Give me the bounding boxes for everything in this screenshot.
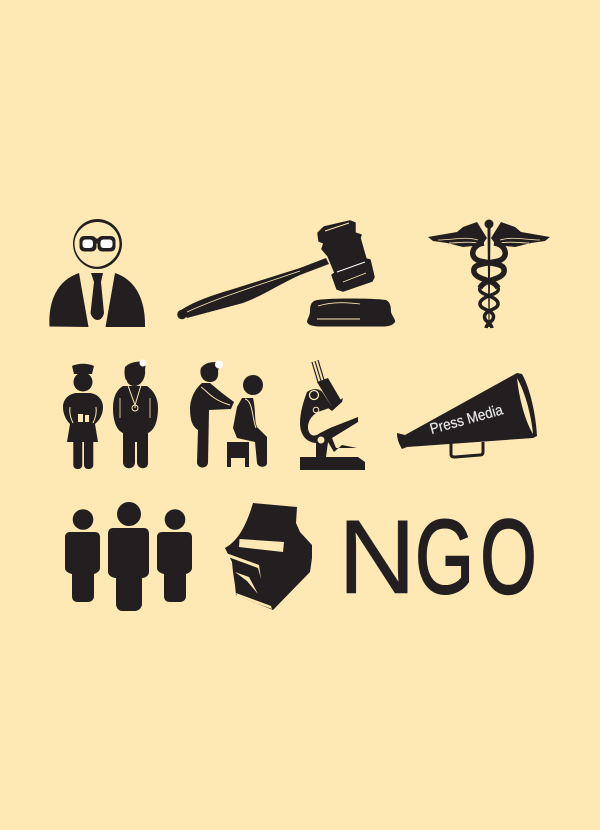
icon: doctor with stethoscope	[113, 360, 158, 468]
heading: NGO	[338, 499, 536, 616]
icon: doctor examining patient	[190, 360, 267, 468]
icon: megaphone	[397, 373, 537, 457]
icon: gavel	[177, 221, 395, 326]
heading: NGO: O	[480, 499, 536, 616]
heading: NGO: N	[338, 499, 416, 616]
icon: caduceus	[428, 220, 550, 328]
heading: NGO: G	[415, 499, 474, 616]
icon: group of people	[65, 502, 192, 611]
icon: microscope	[300, 360, 365, 470]
icon: stack of books	[225, 503, 312, 610]
icon: official with glasses	[49, 219, 145, 327]
icon: nurse	[63, 364, 103, 469]
label: press media: Press Media	[428, 401, 505, 438]
